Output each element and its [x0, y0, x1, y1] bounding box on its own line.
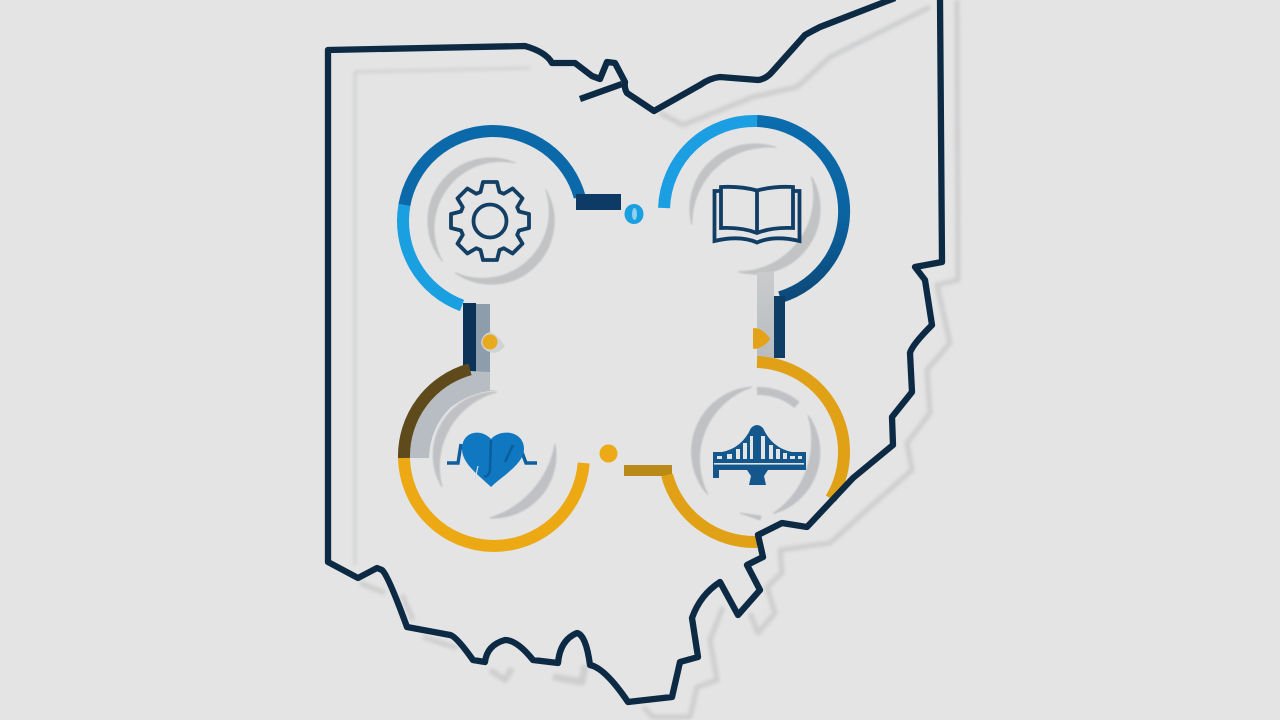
ring: heart (bottom left)	[404, 369, 584, 546]
Ohio outline shadow	[355, 0, 958, 717]
connector: gear to heart	[463, 303, 505, 388]
dot: amber	[754, 329, 769, 348]
connector: book to bridge	[754, 272, 785, 360]
dot: amber	[600, 444, 618, 462]
icon: suspension bridge	[713, 425, 806, 485]
gear ring inner grey arcs	[428, 158, 554, 284]
Ohio state outline	[328, 0, 942, 702]
ring: gear (top left)	[403, 131, 580, 306]
connector: heart to bridge	[600, 444, 672, 476]
ring: bridge (bottom right)	[667, 362, 844, 542]
icon: gear	[451, 182, 529, 260]
heart ring inner grey arcs	[433, 392, 556, 518]
heart ring outer arc	[404, 369, 584, 546]
heart ring grey wedge	[408, 371, 497, 458]
icon: heart with pulse line	[447, 433, 537, 487]
bridge ring inner grey arcs	[692, 387, 820, 520]
icon: open book	[714, 187, 800, 242]
connector: gear to book	[576, 194, 644, 224]
gear ring outer arc	[403, 131, 580, 306]
dot: amber with grey backing	[481, 332, 505, 353]
bridge ring outer arc	[667, 362, 844, 542]
ring: book (top right)	[664, 121, 844, 297]
dot: blue	[624, 204, 644, 224]
book ring outer arc	[664, 121, 844, 297]
book ring inner grey arcs	[690, 144, 820, 274]
